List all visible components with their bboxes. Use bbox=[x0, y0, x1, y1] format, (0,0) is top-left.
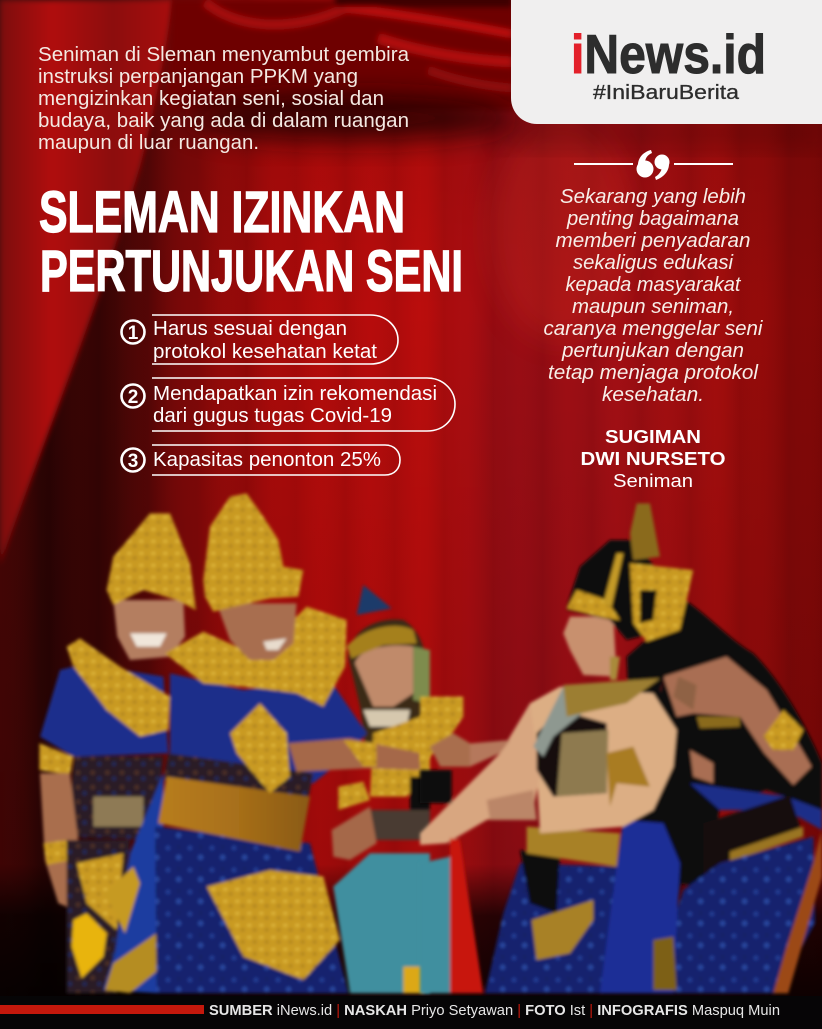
intro paragraph: budaya, baik yang ada di dalam ruangan bbox=[38, 109, 409, 132]
quote attribution: DWI NURSETO bbox=[580, 448, 726, 469]
quote text: kepada masyarakat bbox=[566, 274, 742, 296]
quote text: Sekarang yang lebih bbox=[560, 186, 746, 208]
item 3 bbox=[122, 445, 400, 475]
footer bar bbox=[0, 996, 822, 1029]
item 1: Harus sesuai dengan bbox=[153, 317, 347, 340]
intro paragraph: maupun di luar ruangan. bbox=[38, 131, 259, 154]
quote text: penting bagaimana bbox=[566, 208, 739, 230]
item 2: Mendapatkan izin rekomendasi bbox=[153, 382, 437, 405]
main title: PERTUNJUKAN SENI bbox=[40, 239, 463, 304]
quote text: pertunjukan dengan bbox=[561, 340, 744, 362]
figure: main male performer bbox=[103, 493, 420, 993]
main title bbox=[39, 180, 463, 304]
quote text bbox=[544, 186, 763, 406]
figure: left performer bbox=[39, 513, 196, 993]
logo tagline: #IniBaruBerita bbox=[593, 82, 740, 104]
item 1: 1 bbox=[128, 323, 139, 344]
performers photo, left half bbox=[39, 493, 430, 993]
quote text: memberi penyadaran bbox=[556, 230, 750, 252]
footer red accent bbox=[0, 1005, 204, 1014]
glow behind right column bbox=[490, 120, 630, 340]
quote text: tetap menjaga protokol bbox=[548, 362, 759, 384]
performers photo, right half bbox=[420, 503, 822, 993]
top curtain valance bbox=[165, 0, 515, 140]
figure: center performer skirt edge bbox=[420, 857, 450, 993]
figure: right female performer bbox=[420, 503, 693, 993]
quote text: sekaligus edukasi bbox=[573, 252, 734, 274]
quote attribution: SUGIMAN bbox=[605, 426, 701, 447]
quote attribution bbox=[580, 426, 726, 491]
quote text: maupun seniman, bbox=[572, 296, 734, 318]
item 1: protokol kesehatan ketat bbox=[153, 340, 377, 363]
figure: center performer bbox=[333, 585, 430, 993]
numbered requirements list bbox=[122, 315, 455, 475]
left curtain drape bbox=[0, 0, 173, 565]
item 3: Kapasitas penonton 25% bbox=[153, 448, 381, 471]
item 2 bbox=[122, 378, 455, 431]
item 2: 2 bbox=[128, 387, 138, 408]
main title: SLEMAN IZINKAN bbox=[39, 180, 405, 245]
figure: far right performer bbox=[653, 597, 822, 993]
item 1 bbox=[122, 315, 398, 364]
quote text: caranya menggelar seni bbox=[544, 318, 763, 340]
logo panel bbox=[511, 0, 822, 124]
intro paragraph bbox=[38, 43, 410, 154]
intro paragraph: instruksi perpanjangan PPKM yang bbox=[38, 65, 358, 88]
item 3: 3 bbox=[128, 451, 138, 472]
item 2: dari gugus tugas Covid-19 bbox=[153, 404, 392, 427]
icon: quotation mark with rules bbox=[574, 150, 733, 180]
quote text: kesehatan. bbox=[602, 384, 704, 406]
footer credits: SUMBER iNews.id | NASKAH Priyo Setyawan | FOTO Ist | INFOGRAFIS Maspuq Muin bbox=[209, 1003, 780, 1019]
intro paragraph: mengizinkan kegiatan seni, sosial dan bbox=[38, 87, 384, 110]
logo wordmark: iNews.id bbox=[571, 24, 766, 86]
intro paragraph: Seniman di Sleman menyambut gembira bbox=[38, 43, 410, 66]
quote attribution: Seniman bbox=[613, 470, 693, 491]
